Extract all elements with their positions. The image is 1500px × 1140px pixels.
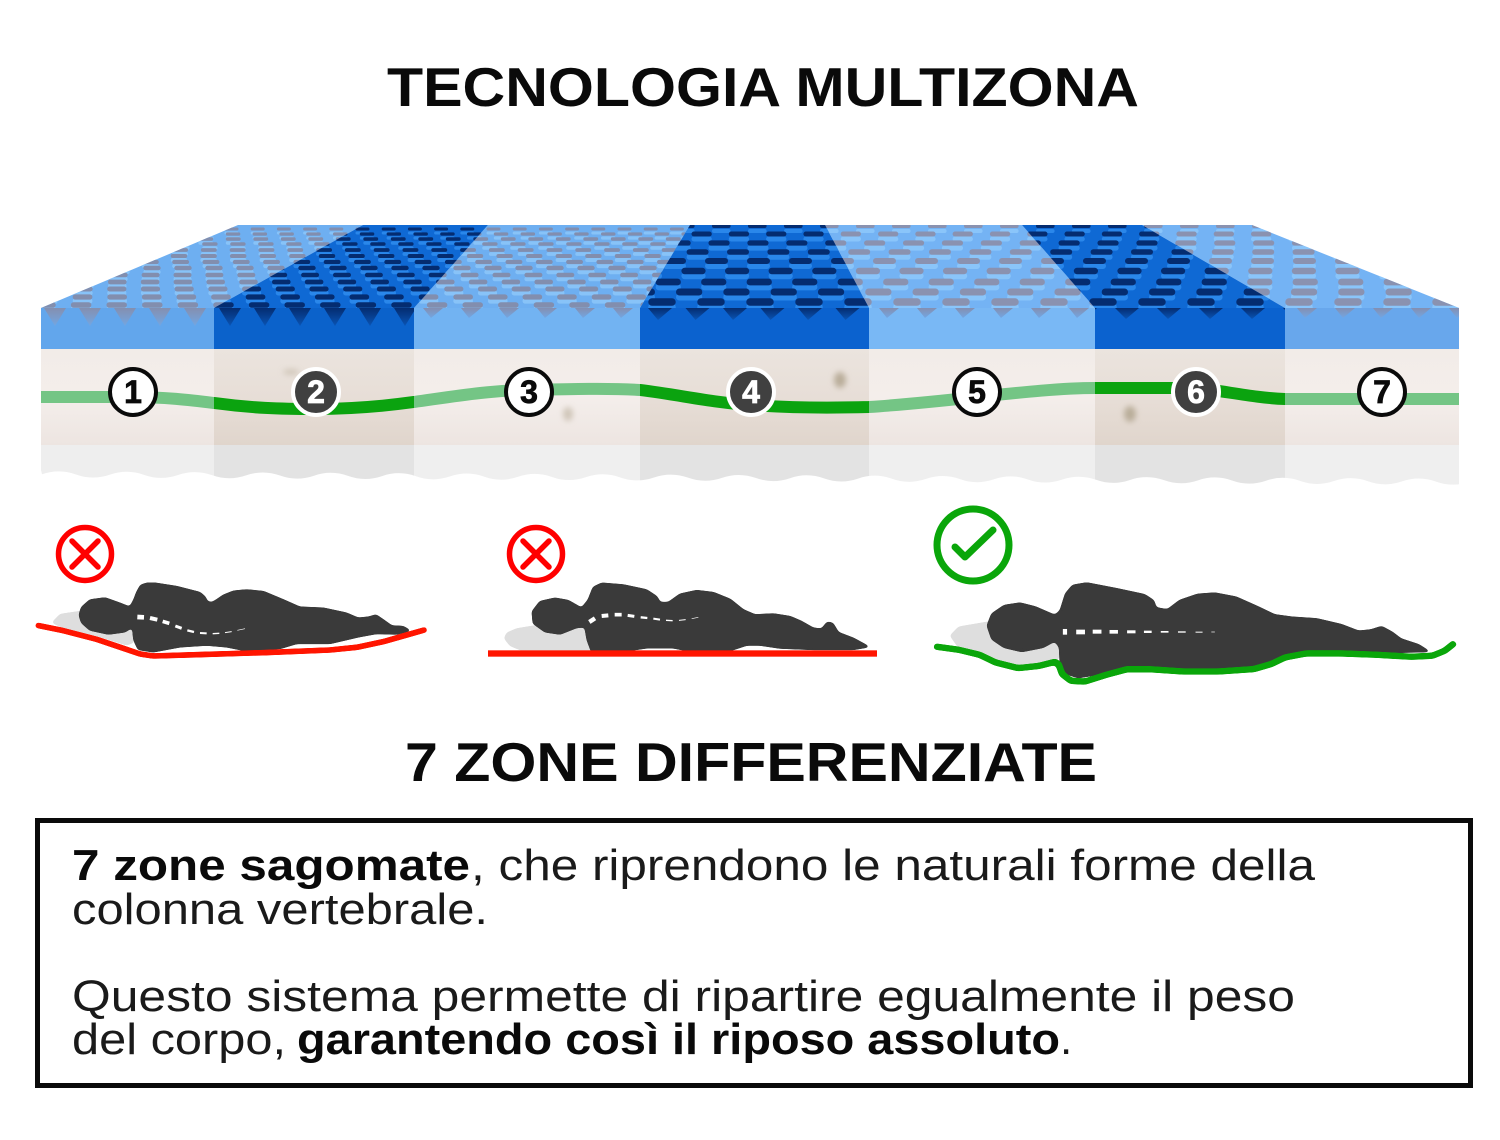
- zone badge 1: [110, 369, 156, 415]
- paragraph 2: .: [1060, 1015, 1072, 1064]
- paragraph 1: [72, 841, 1316, 934]
- zone badge 4: [728, 369, 774, 415]
- box border: [38, 820, 1470, 1086]
- paragraph 1: colonna vertebrale.: [72, 885, 488, 934]
- green spine line across zones: [41, 388, 1459, 409]
- paragraph 1: 7 zone sagomate: [72, 841, 470, 890]
- icon: green check: [937, 509, 1009, 581]
- figure: sagging mattress with curved spine: [36, 583, 427, 656]
- zone badge 6: 6: [1187, 374, 1205, 410]
- zone badge 7: [1359, 369, 1405, 415]
- paragraph 1: , che riprendono le naturali forme della: [471, 841, 1316, 890]
- zone badge 4: 4: [742, 374, 760, 410]
- text box: [38, 820, 1470, 1086]
- paragraph 2: Questo sistema permette di ripartire egualmente il peso: [72, 972, 1295, 1021]
- mattress front face: blue layer: [41, 308, 1459, 349]
- zone badge 2: [293, 369, 339, 415]
- icon: red cross, too soft mattress: [58, 528, 112, 580]
- figure: multizone mattress with straight spine: [934, 583, 1455, 682]
- figure: rigid flat mattress with curved spine: [488, 583, 877, 657]
- zone badge 3: [506, 369, 552, 415]
- zone badge 6: [1173, 369, 1219, 415]
- mattress cross-section with 7 zones: [0, 225, 1500, 490]
- paragraph 2: garantendo così il riposo assoluto: [297, 1015, 1060, 1064]
- zone badge 2: 2: [307, 374, 325, 410]
- paragraph 2: [72, 972, 1295, 1064]
- mattress front face: cream foam layer: [41, 349, 1459, 445]
- zone badge 7: 7: [1373, 374, 1391, 410]
- icon: red cross, too rigid mattress: [510, 528, 562, 580]
- zone badge 5: [954, 369, 1000, 415]
- mattress top surface: egg-crate zones: [0, 225, 1500, 309]
- mattress front face: white wavy base layer: [41, 445, 1459, 484]
- zone badge 1: 1: [124, 374, 142, 410]
- subtitle: 7 ZONE DIFFERENZIATE: [405, 731, 1097, 793]
- zone badge 3: 3: [520, 374, 538, 410]
- title: TECNOLOGIA MULTIZONA: [387, 56, 1139, 118]
- zone badge 5: 5: [968, 374, 986, 410]
- paragraph 2: del corpo,: [72, 1015, 286, 1064]
